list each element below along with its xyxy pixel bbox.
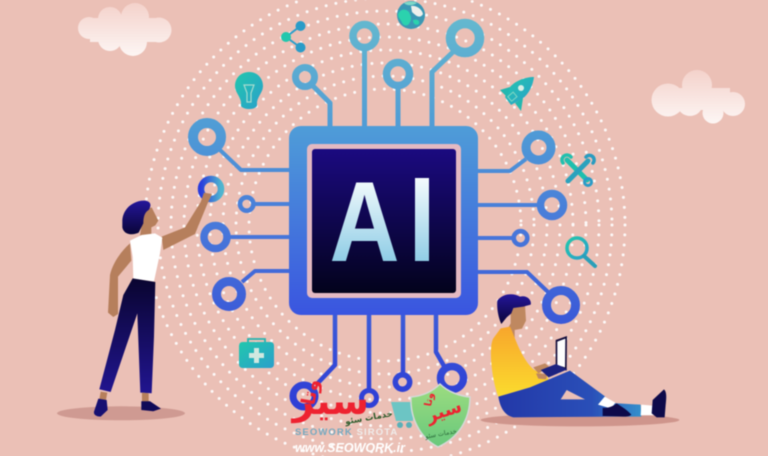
green shield xyxy=(411,384,470,447)
man with laptop xyxy=(481,294,679,426)
right shoe xyxy=(141,401,161,411)
far shin xyxy=(553,401,641,417)
left nodes xyxy=(193,123,253,306)
green shield: سیر xyxy=(423,396,465,427)
AI chip xyxy=(289,126,478,315)
far shoe xyxy=(652,389,666,417)
ground shadow xyxy=(57,406,185,420)
right traces xyxy=(478,159,548,292)
lowered arm xyxy=(108,243,131,317)
neck and face xyxy=(140,207,158,236)
bottom nodes xyxy=(293,366,464,407)
brand name: SEOWORK SIROTA xyxy=(295,427,398,438)
hair xyxy=(497,294,531,324)
right nodes xyxy=(514,135,576,320)
icon: tools xyxy=(562,155,594,186)
dotted concentric circles xyxy=(145,0,625,456)
left shoe xyxy=(94,399,108,417)
chip body xyxy=(289,126,478,315)
icon: cart xyxy=(391,402,413,428)
laptop screen xyxy=(556,336,567,371)
icon: magnifier xyxy=(567,238,595,266)
icon: share xyxy=(281,21,306,52)
chip screen xyxy=(312,149,456,293)
cloud right xyxy=(652,70,745,124)
website address: www.SEOWORK.ir xyxy=(295,441,406,455)
near sock xyxy=(598,397,615,409)
thigh and seat xyxy=(498,371,605,417)
icon: globe xyxy=(397,1,425,29)
AI label: A xyxy=(330,159,399,286)
face and neck xyxy=(503,305,526,340)
hands xyxy=(533,363,550,379)
far sock xyxy=(641,405,657,415)
icon: first aid kit xyxy=(239,339,274,368)
chip inner frame xyxy=(307,144,461,298)
ankles xyxy=(99,392,149,403)
gap under knee xyxy=(561,390,585,399)
red logo script: وتا xyxy=(298,377,324,407)
left traces xyxy=(220,150,289,282)
watermark xyxy=(290,377,470,455)
white top xyxy=(130,233,162,281)
laptop base xyxy=(541,364,567,377)
icon: light bulb xyxy=(235,72,263,109)
top nodes xyxy=(296,24,480,86)
top traces xyxy=(313,48,453,126)
ground shadow xyxy=(481,414,679,426)
green shield: خدمات سئو xyxy=(424,427,457,441)
trousers xyxy=(99,278,155,393)
raised arm xyxy=(162,193,212,250)
green shield: وتا xyxy=(423,392,436,407)
sweater xyxy=(491,327,548,397)
near shoe xyxy=(603,403,631,417)
touched node at the hand xyxy=(201,179,221,199)
cloud left xyxy=(78,3,172,56)
services text: خدمات سئو xyxy=(343,409,394,427)
hair xyxy=(122,201,150,234)
red logo script: سیر xyxy=(290,379,369,423)
circuit traces and nodes xyxy=(193,24,576,407)
icon: rocket xyxy=(500,77,534,111)
woman figure xyxy=(57,193,212,420)
bottom traces xyxy=(316,315,444,390)
